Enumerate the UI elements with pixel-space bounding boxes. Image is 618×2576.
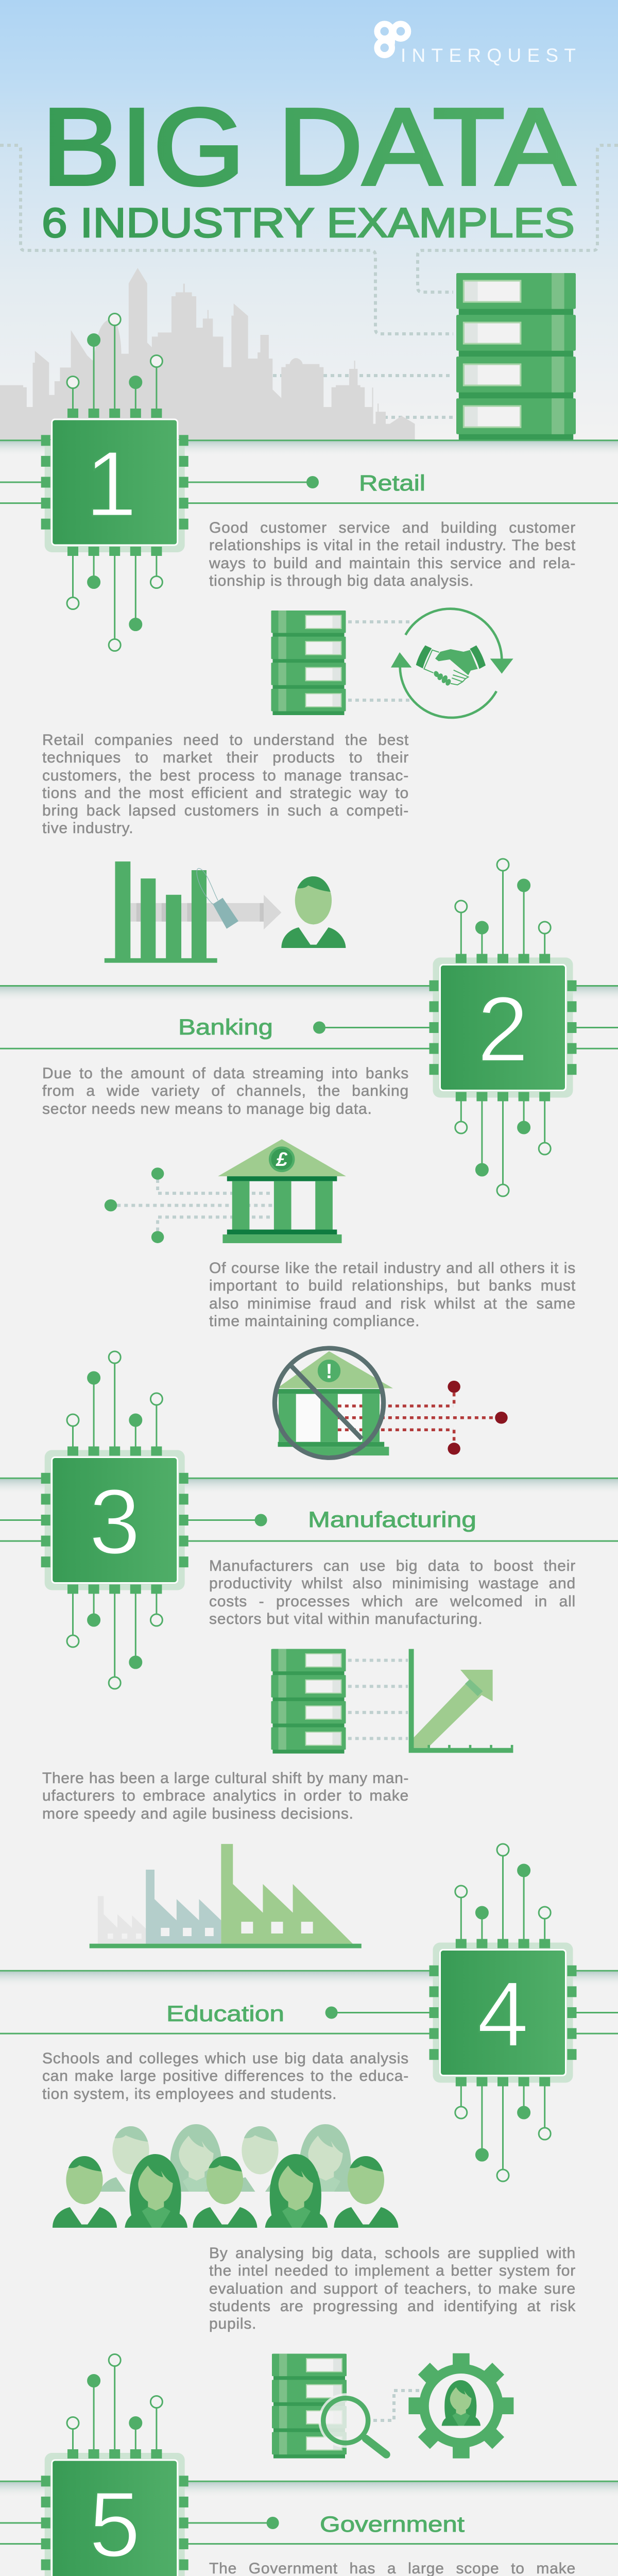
text: education intro: tion system, its employees and students.	[42, 2086, 337, 2103]
text: banking intro: from a wide variety of channels, the banking	[42, 1082, 409, 1099]
section 1: retail header	[0, 313, 618, 651]
text: retail intro: Good customer service and building customer	[209, 519, 576, 536]
chip 4: 4	[477, 1963, 529, 2066]
text: manufacturing intro: costs - processes which are welcomed in all	[209, 1593, 576, 1610]
text: retail intro: ways to build and maintain this service and rela-	[209, 555, 576, 572]
text: banking intro	[42, 1065, 409, 1117]
section 2: banking header	[0, 859, 618, 1196]
text: education detail: students are progressing and identifying at risk	[209, 2298, 576, 2315]
logo: Interquest: INTERQUEST	[401, 45, 576, 66]
text: education detail: By analysing big data, schools are supplied with	[209, 2245, 576, 2262]
chip 5	[41, 2354, 188, 2576]
icon: server with handshake cycle	[271, 609, 513, 718]
text: manufacturing intro: sectors but vital within manufacturing.	[209, 1611, 483, 1628]
text: manufacturing detail: more speedy and agile business decisions.	[42, 1805, 354, 1822]
text: banking detail: time maintaining compliance.	[209, 1313, 420, 1330]
text: education detail	[209, 2245, 576, 2332]
icon: large server	[456, 273, 576, 440]
logo: Interquest	[377, 24, 576, 66]
chip 2	[430, 859, 577, 1196]
icon: bank with data streams: £	[276, 1149, 287, 1171]
text: retail detail: tions and the most efficient and strategic way to	[42, 785, 409, 802]
text: education intro	[42, 2050, 409, 2103]
text: education detail: the intel needed to implement a better system for	[209, 2262, 576, 2279]
text: manufacturing detail	[42, 1770, 409, 1822]
chip 3: 3	[89, 1470, 141, 1573]
text: banking detail: important to build relationships, but banks must	[209, 1277, 576, 1294]
text: education detail: pupils.	[209, 2315, 256, 2332]
subtitle: 6 industry examples: 6 INDUSTRY EXAMPLES	[42, 200, 575, 246]
chip 1	[41, 313, 188, 651]
heading: Banking: Banking	[178, 1015, 273, 1040]
text: retail detail: techniques to market their products to their	[42, 749, 409, 766]
text: retail detail: tive industry.	[42, 820, 133, 837]
text: retail intro: tionship is through big data analysis.	[209, 572, 474, 589]
icon: server search and teacher gear	[272, 2353, 513, 2459]
text: banking intro: Due to the amount of data streaming into banks	[42, 1065, 409, 1082]
heading: Retail: Retail	[359, 471, 425, 496]
text: banking detail: Of course like the retail industry and all others it is	[209, 1260, 576, 1277]
city skyline	[0, 268, 415, 439]
title: Big Data: BIG DATA	[42, 86, 575, 208]
text: manufacturing detail: ufacturers to embrace analytics in order to make	[42, 1787, 409, 1804]
chip 2: 2	[477, 978, 529, 1081]
section 4: education header	[0, 1844, 618, 2181]
section 5: government header	[0, 2354, 618, 2576]
header dashed connectors	[0, 145, 618, 417]
icon: bank with risk warning	[274, 1348, 508, 1458]
text: banking detail: also minimise fraud and risk whilst at the same	[209, 1295, 576, 1312]
text: retail detail: bring back lapsed customers in such a competi-	[42, 802, 409, 819]
text: banking intro: sector needs new means to manage big data.	[42, 1100, 372, 1117]
chip 4	[430, 1844, 577, 2181]
text: retail detail	[42, 732, 409, 837]
icon: group of students	[53, 2124, 398, 2228]
text: manufacturing intro: productivity whilst also minimising wastage and	[209, 1575, 576, 1592]
text: education intro: Schools and colleges which use big data analysis	[42, 2050, 409, 2067]
heading: Manufacturing: Manufacturing	[308, 1507, 476, 1532]
icon: bank with data streams	[105, 1139, 346, 1243]
icon: server with growth chart	[271, 1649, 513, 1754]
chip 5: 5	[89, 2473, 141, 2576]
text: manufacturing intro: Manufacturers can use big data to boost their	[209, 1557, 576, 1574]
text: retail intro	[209, 519, 576, 589]
chip 3	[41, 1351, 188, 1689]
text: manufacturing intro	[209, 1557, 576, 1628]
text: banking detail	[209, 1260, 576, 1330]
icon: factories	[90, 1844, 362, 1948]
text: retail detail: customers, the best process to manage transac-	[42, 767, 409, 784]
section 3: manufacturing header	[0, 1351, 618, 1689]
text: retail detail: Retail companies need to understand the best	[42, 732, 409, 749]
heading: Education: Education	[166, 2002, 284, 2026]
text: education intro: can make large positive differences to the educa-	[42, 2067, 409, 2084]
icon: bank with risk warning: !	[325, 1360, 333, 1383]
chip 1: 1	[85, 432, 137, 536]
heading: Government: Government	[320, 2512, 465, 2537]
icon: sales chart, price tag and customer	[105, 861, 346, 963]
text: manufacturing detail: There has been a large cultural shift by many man-	[42, 1770, 409, 1787]
text: retail intro: relationships is vital in the retail industry. The best	[209, 537, 576, 554]
text: education detail: evaluation and support of teachers, to make sure	[209, 2280, 576, 2297]
